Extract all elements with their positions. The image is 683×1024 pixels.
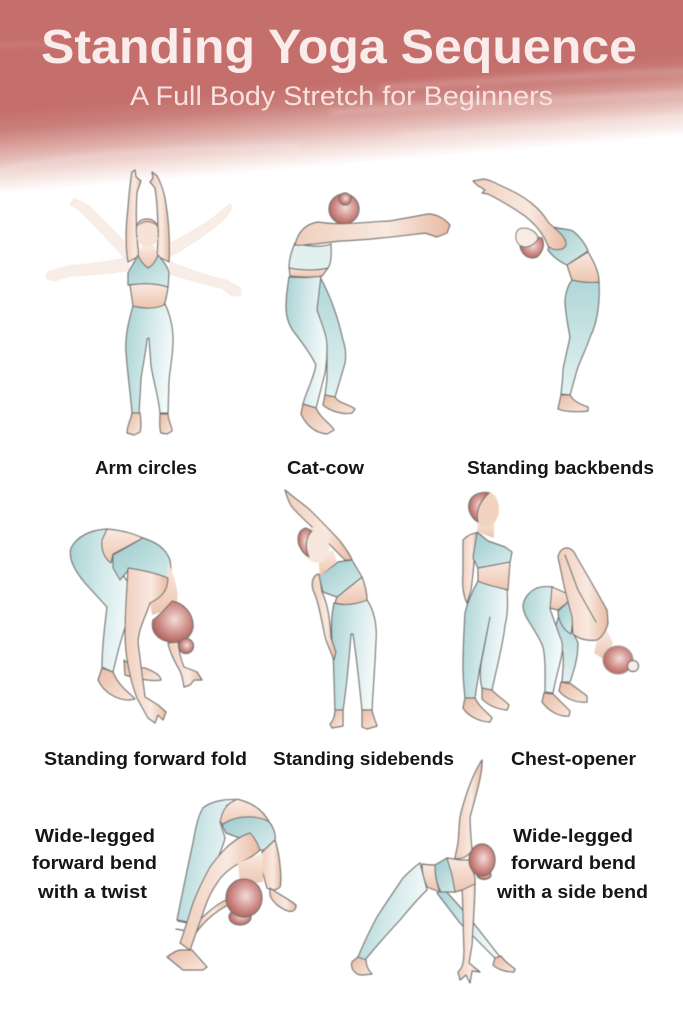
- midriff: [335, 577, 367, 604]
- figure: standing sidebend: [285, 490, 377, 729]
- text: wide-legged forward bend with a twist: [32, 826, 157, 902]
- chest: [447, 858, 475, 892]
- label: Cat-cow: Cat-cow: [287, 458, 365, 478]
- text: wide-legged forward bend with a side bend: [496, 826, 648, 902]
- sports top: [222, 817, 275, 850]
- sports top: [113, 538, 172, 590]
- title: Standing Yoga Sequence: [41, 21, 637, 74]
- feet: [127, 413, 141, 435]
- front leg: [523, 587, 562, 693]
- back foot: [559, 682, 587, 702]
- neck: [238, 853, 263, 885]
- head: [226, 879, 262, 917]
- neck: [150, 562, 178, 615]
- figure: wide-legged forward bend with a side bend: [352, 760, 515, 983]
- extended arm: [295, 214, 450, 245]
- hair and bun: [329, 194, 359, 224]
- bun: [178, 638, 194, 654]
- arm: [463, 533, 477, 603]
- near arm: [125, 568, 168, 723]
- sports top: [128, 255, 169, 287]
- midriff: [130, 284, 168, 308]
- front foot: [167, 950, 207, 970]
- near leg: [358, 863, 427, 960]
- standing person: [463, 491, 512, 722]
- hair: [520, 236, 543, 258]
- sports top: [473, 532, 512, 568]
- midriff: [567, 252, 599, 282]
- figure: arm circles: [46, 170, 241, 435]
- lower arm: [458, 883, 480, 983]
- midriff: [220, 799, 273, 830]
- label: Arm circles: Arm circles: [95, 458, 197, 478]
- figure: wide-legged forward bend with a twist: [167, 799, 296, 970]
- leggings: [332, 600, 376, 710]
- hair: [469, 493, 489, 522]
- raised arm: [473, 179, 566, 250]
- far upper arm: [262, 840, 281, 890]
- raised arm: [285, 490, 352, 560]
- right raised arm: [150, 172, 169, 262]
- head: [473, 491, 499, 527]
- text: wide-legged forward bend with a twist: with a twist: [37, 882, 147, 902]
- sports top: [548, 227, 588, 265]
- hair: [298, 528, 312, 557]
- left foot: [352, 957, 372, 975]
- leggings: [463, 581, 507, 698]
- sports top: [289, 243, 331, 270]
- midriff: [289, 266, 328, 277]
- midriff: [550, 587, 570, 610]
- head: [469, 844, 495, 876]
- subtitle: A Full Body Stretch for Beginners: [130, 81, 553, 111]
- far forearm: [192, 900, 228, 934]
- face: [516, 228, 538, 247]
- bent person: [523, 548, 638, 716]
- text: wide-legged forward bend with a twist: Wide-legged: [35, 826, 155, 846]
- neck: [477, 518, 494, 538]
- near arm: [180, 833, 260, 950]
- head: [296, 523, 334, 567]
- bun: [477, 870, 491, 880]
- figure: cat-cow: [286, 193, 450, 434]
- legs: [126, 304, 173, 413]
- front foot: [463, 698, 492, 722]
- back leg: [317, 277, 346, 397]
- text: wide-legged forward bend with a twist: forward bend: [32, 853, 157, 873]
- figure: standing backbend: [473, 179, 599, 412]
- far leg: [437, 888, 500, 958]
- text: wide-legged forward bend with a side bend: forward bend: [511, 853, 636, 873]
- text: wide-legged forward bend with a side bend: Wide-legged: [513, 826, 633, 846]
- neck and head: [138, 246, 158, 268]
- neck: [594, 630, 613, 660]
- feet: [330, 710, 343, 728]
- label: Chest-opener: Chest-opener: [511, 749, 636, 769]
- leg: [561, 280, 599, 395]
- sports top: [319, 560, 362, 597]
- far forearm tip: [270, 888, 296, 911]
- foot: [558, 395, 588, 412]
- front foot: [542, 693, 570, 716]
- back foot: [124, 660, 161, 681]
- left raised arm: [126, 170, 141, 262]
- midriff: [478, 561, 510, 590]
- back foot: [323, 395, 355, 414]
- raised arm: [455, 760, 482, 859]
- label: Standing forward fold: Standing forward fold: [44, 749, 247, 769]
- right foot: [493, 956, 515, 972]
- sports top: [435, 858, 460, 892]
- far arm: [168, 642, 202, 687]
- sports top: [558, 602, 573, 634]
- text: wide-legged forward bend with a side bend: with a side bend: [496, 882, 648, 902]
- neck: [318, 550, 337, 576]
- label: Standing backbends: Standing backbends: [467, 458, 654, 478]
- midriff: [422, 864, 440, 892]
- figure: chest opener: [463, 491, 638, 722]
- bun: [628, 660, 638, 672]
- bun: [229, 909, 251, 925]
- header brush banner: [0, 0, 683, 220]
- front foot: [301, 404, 334, 434]
- leggings: [70, 529, 133, 672]
- front foot: [98, 668, 135, 700]
- back foot: [482, 688, 509, 710]
- label: Standing sidebends: Standing sidebends: [273, 749, 454, 769]
- figure: standing forward fold: [70, 529, 202, 723]
- leggings: [177, 799, 240, 923]
- back leg: [556, 612, 578, 682]
- front leg: [286, 275, 327, 408]
- midriff: [102, 529, 143, 563]
- ghost arm positions: [46, 199, 241, 296]
- ankle lines: [176, 921, 193, 932]
- head hair: [152, 601, 193, 642]
- head: [603, 646, 633, 674]
- lowered arm: [312, 574, 336, 660]
- clasped arms: [558, 548, 608, 640]
